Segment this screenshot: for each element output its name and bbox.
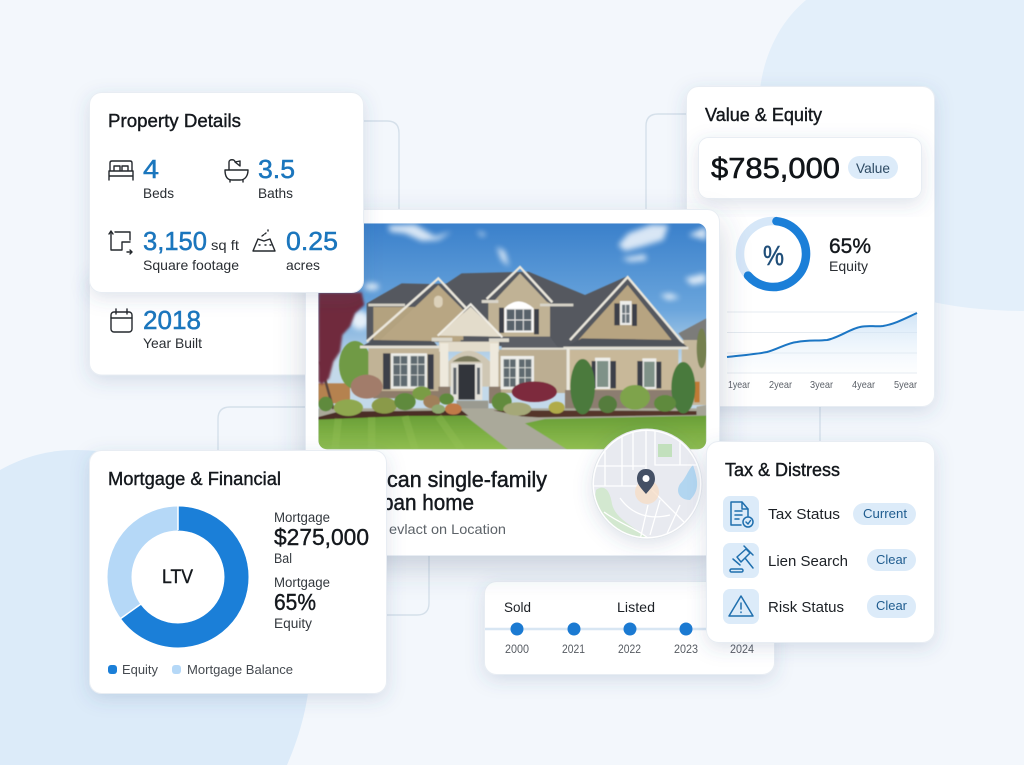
row: lien search xyxy=(723,543,916,578)
panel: mortgage and financial xyxy=(90,450,386,694)
timeline event labels xyxy=(504,599,655,615)
background blob: bottom left xyxy=(0,450,310,765)
property value: $785,000 xyxy=(711,153,840,185)
value box xyxy=(698,138,922,198)
timeline years: 2024 xyxy=(730,644,755,656)
donut equity slice xyxy=(120,518,236,636)
value trend line chart: 3year xyxy=(810,379,833,391)
panel: property details xyxy=(90,92,364,292)
panel: main property card xyxy=(306,210,720,556)
mortgage figures xyxy=(274,510,369,631)
equity ring xyxy=(737,218,809,290)
property type title: can single-family xyxy=(387,467,547,492)
panel: year built xyxy=(90,270,330,375)
panel: sales timeline xyxy=(484,582,774,674)
ring value xyxy=(737,218,809,290)
year built card xyxy=(90,270,330,375)
mortgage figures: Mortgage xyxy=(274,575,330,590)
timeline years: 2021 xyxy=(562,644,585,656)
tax card xyxy=(706,442,934,642)
property type title xyxy=(382,467,547,515)
heading: property details: Property Details xyxy=(108,111,241,131)
mortgage figures: Equity xyxy=(274,616,312,631)
chart legend: Mortgage Balance xyxy=(187,662,293,677)
chart legend: Equity xyxy=(122,662,158,677)
timeline track xyxy=(485,628,774,630)
icon: bed xyxy=(109,161,133,180)
heading: value and equity: Value & Equity xyxy=(705,105,822,125)
icon: lot size xyxy=(253,230,275,251)
value trend line chart: 5year xyxy=(894,379,917,391)
mortgage figures: 65% xyxy=(274,589,316,615)
background blob: top right xyxy=(759,0,1024,311)
LTV donut chart xyxy=(120,505,236,636)
property details card xyxy=(90,92,364,292)
baths label: Baths xyxy=(258,185,293,201)
house photo illustration xyxy=(318,223,707,449)
row: tax status xyxy=(723,496,916,532)
property type title: ban home xyxy=(382,490,474,515)
baths value: 3.5 xyxy=(258,154,295,184)
value trend line chart xyxy=(727,312,917,391)
location subtitle: evlact on Location xyxy=(389,521,506,537)
row: risk status xyxy=(723,589,916,624)
year built value: 2018 xyxy=(143,305,201,335)
icon: calendar xyxy=(111,309,132,332)
square footage value: 3,150 xyxy=(143,226,207,256)
location map xyxy=(590,428,704,545)
value trend line chart: 1year xyxy=(728,379,750,391)
timeline event labels: Listed xyxy=(617,599,655,615)
square footage unit: sq ft xyxy=(211,237,239,253)
timeline years xyxy=(505,644,755,656)
value trend line chart: 2year xyxy=(769,379,792,391)
panel: value and equity xyxy=(686,86,934,406)
ring track xyxy=(740,221,806,287)
value card xyxy=(686,86,934,406)
value trend line chart: 4year xyxy=(852,379,875,391)
mortgage figures: Bal xyxy=(274,551,292,566)
row: lien search: Lien Search xyxy=(768,553,848,570)
timeline event labels: Sold xyxy=(504,599,531,615)
equity percent: 65% xyxy=(829,235,871,258)
timeline years: 2023 xyxy=(674,644,698,656)
equity label: Equity xyxy=(829,258,868,274)
year built label: Year Built xyxy=(143,335,202,351)
row: lien search: Clear xyxy=(876,552,908,567)
acres label: acres xyxy=(286,257,320,273)
timeline dots xyxy=(510,622,692,636)
row: tax status: Current xyxy=(863,506,907,521)
icon: square footage xyxy=(109,231,132,254)
percent symbol: % xyxy=(763,240,784,271)
connector lines xyxy=(218,114,820,615)
row: tax status: Tax Status xyxy=(768,506,840,523)
icon: bath xyxy=(225,160,248,182)
heading: mortgage and financial: Mortgage & Financial xyxy=(108,469,281,489)
mortgage figures: Mortgage xyxy=(274,510,330,525)
timeline card xyxy=(484,582,774,674)
beds label: Beds xyxy=(143,185,174,201)
timeline years: 2000 xyxy=(505,644,529,656)
value box background xyxy=(698,138,922,198)
square footage label: Square footage xyxy=(143,257,239,273)
heading: tax and distress: Tax & Distress xyxy=(725,460,840,480)
mortgage figures: $275,000 xyxy=(274,524,369,550)
donut mortgage balance slice xyxy=(120,518,236,636)
row: risk status: Risk Status xyxy=(768,599,844,616)
chart legend xyxy=(108,662,293,677)
mortgage card xyxy=(90,450,386,694)
panel: tax and distress xyxy=(706,442,934,642)
main card background xyxy=(306,210,720,556)
map pin xyxy=(637,469,655,494)
acres value: 0.25 xyxy=(286,226,338,256)
beds value: 4 xyxy=(143,154,159,184)
row: risk status: Clear xyxy=(876,598,908,613)
donut center label: LTV xyxy=(162,567,193,588)
timeline years: 2022 xyxy=(618,644,641,656)
value pill: Value xyxy=(856,160,890,176)
value pill xyxy=(848,156,898,179)
